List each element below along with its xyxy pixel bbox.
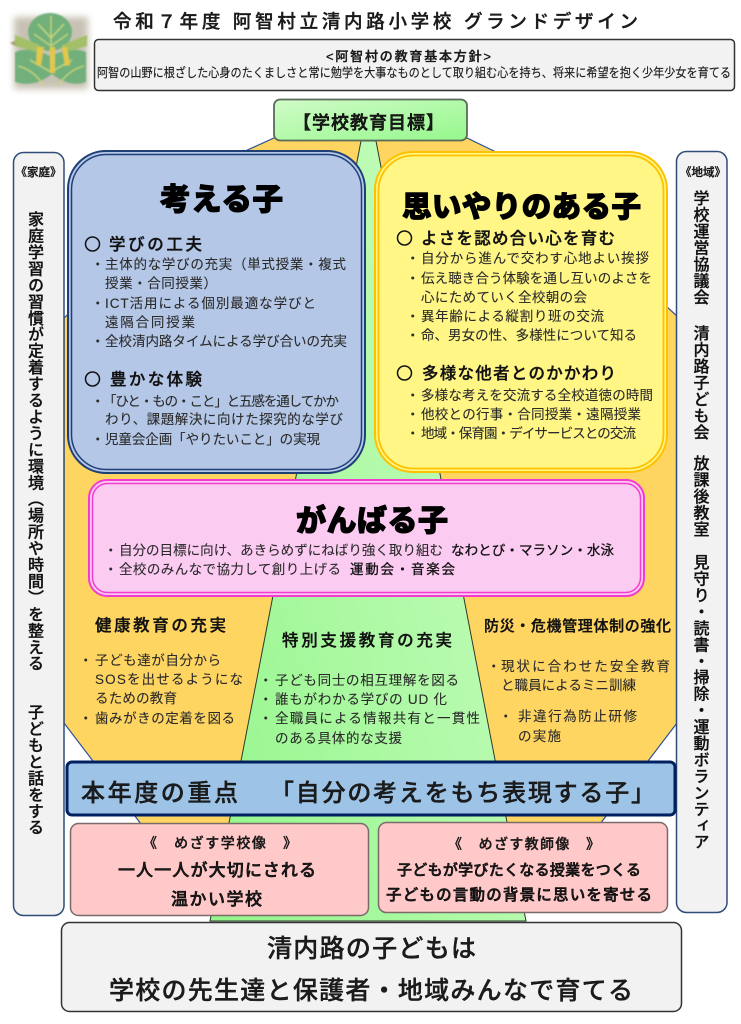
panel: thinking child xyxy=(68,151,365,473)
panel: school vision: 一人一人が大切にされる xyxy=(118,860,316,880)
panel: thinking child: 遠隔合同授業 xyxy=(105,315,196,330)
panel: home: 《家庭》 xyxy=(16,165,62,179)
panel: community: 見守り・読書・掃除・運動ボランティア xyxy=(690,554,710,850)
background shape: green centre trapezoid xyxy=(210,141,526,921)
panel: caring child: 心にためていく全校朝の会 xyxy=(421,290,588,305)
panel: hard-working child: 自分の目標に向け、あきらめずにねばり強く取り組む xyxy=(119,543,443,558)
panel: caring child: ・ xyxy=(406,328,420,343)
heading: school education goal xyxy=(274,100,467,140)
text block: special needs education: 誰もがわかる学びの UD 化 xyxy=(275,692,448,707)
panel: home xyxy=(14,152,64,916)
panel: teacher vision xyxy=(378,822,668,912)
text block: special needs education xyxy=(259,631,480,746)
panel: hard-working child: なわとび・マラソン・水泳 xyxy=(451,543,614,558)
panel: teacher vision: 《 めざす教師像 》 xyxy=(448,836,600,852)
panel: caring child: ・ xyxy=(406,426,420,441)
title: 令和７年度 阿智村立清内路小学校 グランドデザイン xyxy=(113,11,638,32)
panel: village education policy xyxy=(94,40,734,90)
panel: community: 清内路子ども会 xyxy=(690,325,710,441)
text block: disaster and crisis management: ・ xyxy=(487,659,500,674)
panel: thinking child: 授業・合同授業） xyxy=(105,276,217,291)
text block: health education: るための教育 xyxy=(95,691,177,706)
panel: hard-working child: ・ xyxy=(104,562,118,577)
banner: this year's focus xyxy=(67,762,675,815)
text block: special needs education: ・ xyxy=(259,692,272,707)
text block: health education: SOSを出せるようにな xyxy=(95,672,243,687)
banner: this year's focus: 「自分の考えをもち表現する子」 xyxy=(270,780,655,807)
panel: hard-working child: 全校のみんなで協力して創り上げる xyxy=(119,562,341,577)
panel: closing message: 学校の先生達と保護者・地域みんなで育てる xyxy=(109,977,633,1005)
panel: community xyxy=(676,152,727,912)
panel: school vision xyxy=(70,824,368,916)
text block: disaster and crisis management xyxy=(484,617,671,744)
banner: this year's focus: 本年度の重点 xyxy=(81,780,238,807)
text block: disaster and crisis management: 防災・危機管理体制の強化 xyxy=(484,617,671,635)
panel: caring child: ・ xyxy=(406,251,420,266)
panel: hard-working child: 運動会・音楽会 xyxy=(350,561,456,577)
text block: special needs education: 特別支援教育の充実 xyxy=(282,631,452,650)
text block: health education: 歯みがきの定着を図る xyxy=(95,710,235,726)
panel: teacher vision: 子どもが学びたくなる授業をつくる xyxy=(397,861,641,879)
panel: caring child: ・ xyxy=(406,407,420,422)
text block: health education: 健康教育の充実 xyxy=(95,616,226,635)
panel: thinking child: ICT活用による個別最適な学びと xyxy=(105,296,316,311)
panel: caring child: 他校との行事・合同授業・遠隔授業 xyxy=(421,407,642,422)
panel: community: 《地域》 xyxy=(680,165,726,179)
text block: special needs education: ・ xyxy=(259,711,272,726)
heading: school education goal: 【学校教育目標】 xyxy=(293,113,444,133)
panel: village education policy: <阿智村の教育基本方針> xyxy=(326,49,491,64)
panel: thinking child: 考える子 xyxy=(160,183,283,217)
panel: school vision: 《 めざす学校像 》 xyxy=(143,835,297,851)
panel: caring child: 命、男女の性、多様性について知る xyxy=(421,327,637,343)
panel: home: 子どもと話をする xyxy=(25,704,44,836)
panel: hard-working child xyxy=(89,480,644,596)
panel: closing message: 清内路の子どもは xyxy=(267,935,476,963)
icon: village crest xyxy=(10,13,88,89)
text block: health education: ・ xyxy=(79,711,92,726)
panel: school vision: 温かい学校 xyxy=(171,890,262,909)
panel: caring child xyxy=(375,152,667,472)
panel: caring child: ・ xyxy=(406,309,420,324)
panel: teacher vision: 子どもの言動の背景に思いを寄せる xyxy=(386,886,652,904)
panel: caring child: ・ xyxy=(406,388,420,403)
panel: thinking child: ・ xyxy=(91,257,104,272)
text block: disaster and crisis management: 現状に合わせた安全教育 xyxy=(501,659,670,674)
text block: disaster and crisis management: と職員によるミニ訓練 xyxy=(501,678,636,693)
panel: thinking child: ・ xyxy=(91,394,104,409)
panel: community: 放課後教室 xyxy=(690,455,710,537)
panel: thinking child: 学びの工夫 xyxy=(109,235,202,254)
text block: special needs education: ・ xyxy=(259,673,272,688)
panel: thinking child: 「ひと・もの・こと」と五感を通してかか xyxy=(103,393,340,409)
background shape: orange octagon xyxy=(64,138,677,835)
panel: thinking child: 児童会企画「やりたいこと」の実現 xyxy=(105,432,320,447)
panel: caring child: 多様な考えを交流する全校道徳の時間 xyxy=(421,388,653,403)
panel: hard-working child: がんばる子 xyxy=(296,504,448,538)
text block: special needs education: 全職員による情報共有と一貫性 xyxy=(275,711,480,726)
panel: caring child: 自分から進んで交わす心地よい挨拶 xyxy=(421,251,650,266)
panel: closing message xyxy=(62,922,682,1012)
text block: disaster and crisis management: の実施 xyxy=(518,729,562,744)
text block: disaster and crisis management: 非違行為防止研修 xyxy=(518,709,638,724)
panel: thinking child: ・ xyxy=(91,432,104,447)
text block: special needs education: のある具体的な支援 xyxy=(275,731,402,746)
panel: caring child: 異年齢による縦割り班の交流 xyxy=(421,309,604,324)
text block: health education: ・ xyxy=(79,653,92,668)
panel: home: 家庭学習の習慣が定着するように環境（場所や時間）を整える xyxy=(25,211,44,672)
panel: caring child: ・ xyxy=(406,271,420,286)
panel: thinking child: ・ xyxy=(91,296,104,311)
panel: hard-working child: ・ xyxy=(104,543,118,558)
text block: health education xyxy=(79,616,243,726)
panel: thinking child: わり、課題解決に向けた探究的な学び xyxy=(105,411,344,427)
panel: caring child: 多様な他者とのかかわり xyxy=(422,364,616,383)
panel: caring child: 思いやりのある子 xyxy=(402,191,641,224)
text block: disaster and crisis management: ・ xyxy=(499,709,512,724)
panel: thinking child: 全校清内路タイムによる学び合いの充実 xyxy=(105,334,347,349)
panel: community: 学校運営協議会 xyxy=(690,190,710,306)
panel: thinking child: 主体的な学びの充実（単式授業・複式 xyxy=(105,256,346,272)
panel: caring child: よさを認め合い心を育む xyxy=(421,229,615,248)
text block: health education: 子ども達が自分から xyxy=(95,653,221,668)
panel: thinking child: ・ xyxy=(91,334,104,349)
panel: caring child: 地域・保育園・デイサービスとの交流 xyxy=(421,425,636,441)
panel: thinking child: 豊かな体験 xyxy=(110,370,202,389)
text block: special needs education: 子ども同士の相互理解を図る xyxy=(275,673,459,688)
panel: caring child: 伝え聴き合う体験を通し互いのよさを xyxy=(421,271,652,286)
